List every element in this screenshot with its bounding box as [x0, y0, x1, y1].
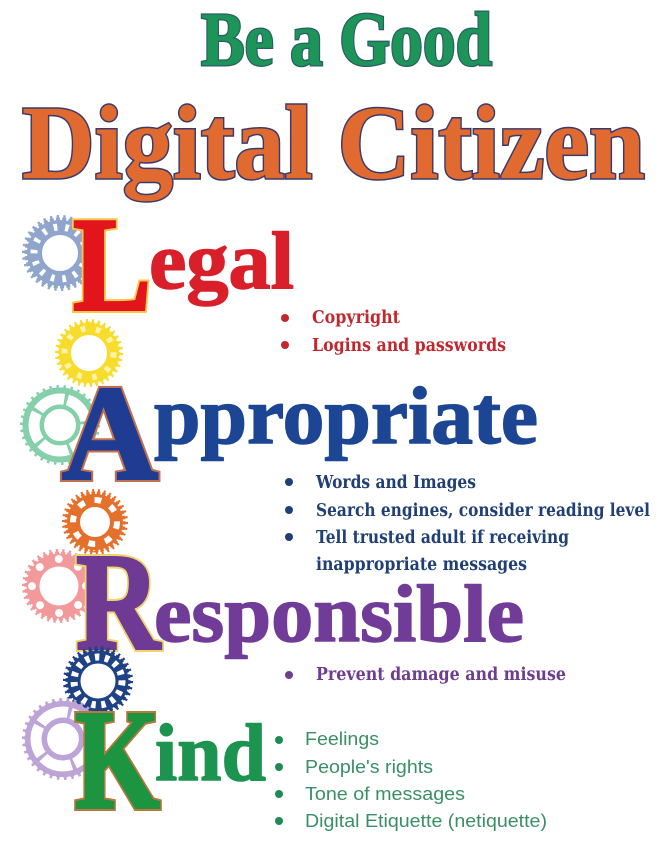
bullet list: Appropriate: Words and Images	[315, 473, 476, 493]
bullet list: Kind	[275, 728, 547, 831]
panel: Responsible	[24, 490, 566, 685]
icon: orange gear	[64, 490, 126, 554]
icon: yellow gear	[56, 320, 122, 386]
bullet list: Legal: Logins and passwords	[312, 336, 506, 356]
big letter R: R	[76, 526, 161, 680]
icon: blue-grey gear	[24, 216, 96, 290]
title	[22, 0, 645, 201]
bullet list: Appropriate: inappropriate messages	[316, 555, 527, 575]
icon: pink gear	[24, 550, 94, 622]
bullet list: Kind: People's rights	[305, 756, 433, 777]
bullet list: Appropriate: Tell trusted adult if receiving	[316, 528, 569, 548]
heading: ind: ind	[155, 707, 266, 798]
big letter R: R	[76, 526, 161, 680]
bullet list: Kind: Digital Etiquette (netiquette)	[305, 810, 547, 831]
heading: ppropriate: ppropriate	[154, 370, 538, 461]
bullet list: Kind: Tone of messages	[305, 783, 465, 804]
bullet list: Responsible: Prevent damage and misuse	[316, 665, 566, 685]
icon: navy gear	[64, 648, 132, 714]
panel: Appropriate	[22, 360, 650, 575]
big letter L: L	[73, 190, 151, 338]
title line: Be a Good: Be a Good	[201, 0, 492, 82]
bullet list: Legal: Copyright	[312, 308, 400, 328]
heading: egal: egal	[149, 215, 294, 306]
panel: Kind	[24, 648, 547, 838]
big letter K: K	[75, 680, 160, 838]
big letter A: A	[62, 360, 158, 508]
big letter K: K	[75, 680, 160, 838]
bullet list: Appropriate	[285, 473, 650, 575]
icon: lilac gear	[24, 700, 102, 778]
big letter A: A	[62, 360, 158, 508]
bullet list: Legal	[281, 308, 506, 356]
title line: Digital Citizen: Digital Citizen	[22, 84, 645, 201]
big letter L: L	[73, 190, 151, 338]
panel: Legal	[24, 190, 506, 386]
heading: esponsible: esponsible	[154, 568, 524, 659]
icon: green gear	[22, 386, 98, 464]
title line: Be a Good: Be a Good	[201, 0, 492, 82]
bullet list: Kind: Feelings	[305, 728, 379, 749]
title line: Digital Citizen: Digital Citizen	[22, 84, 645, 201]
